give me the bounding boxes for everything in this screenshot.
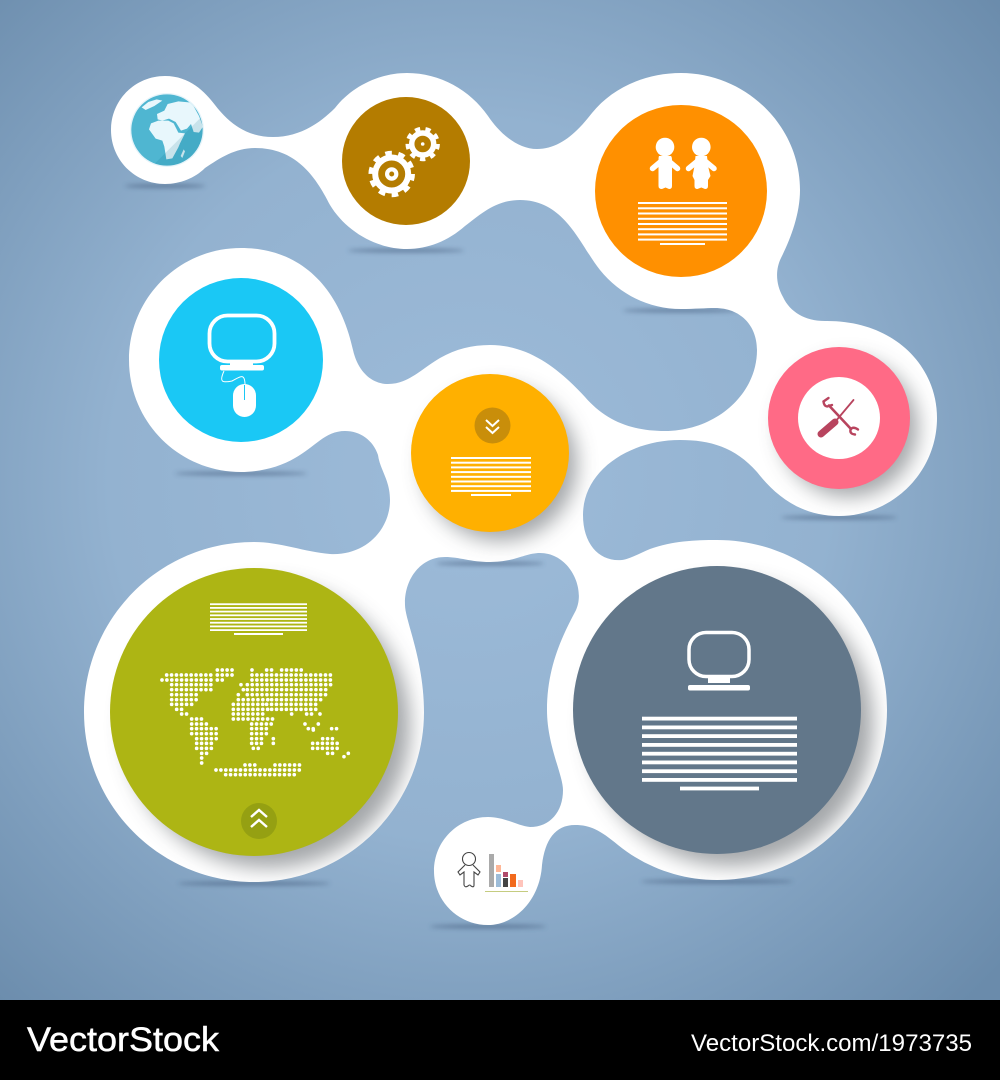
inner card shadows bbox=[126, 359, 918, 868]
icon: small bar chart bbox=[485, 854, 528, 892]
icon: small gear bbox=[408, 129, 438, 159]
node: slate card bbox=[573, 566, 861, 854]
text lines: yellow bbox=[451, 457, 531, 496]
icon: boy bbox=[652, 138, 678, 189]
node: blue monitor and mouse bbox=[159, 278, 323, 442]
image id text: VectorStock.com/1973735 bbox=[691, 1030, 972, 1057]
icon: dotted world map bbox=[162, 670, 349, 775]
watermark bar bbox=[0, 1000, 1000, 1080]
ground shadows bbox=[125, 184, 897, 928]
icon: large gear bbox=[371, 153, 413, 195]
node: globe bbox=[130, 93, 204, 167]
white connected metaball shape bbox=[84, 73, 937, 925]
icon: mouse bbox=[222, 371, 256, 417]
node: gears bbox=[342, 97, 470, 225]
icon: monitor bbox=[210, 316, 274, 370]
node: orange people bbox=[595, 105, 767, 277]
icon: chevron badge bbox=[474, 408, 510, 444]
icon: girl bbox=[688, 138, 714, 189]
node: yellow card bbox=[411, 374, 569, 532]
text lines: orange bbox=[638, 202, 727, 245]
node: green map card bbox=[110, 568, 398, 856]
text lines: slate bbox=[642, 717, 797, 790]
icon: child outline bbox=[458, 852, 480, 887]
icon: monitor bbox=[688, 632, 750, 690]
node: pink tools bbox=[768, 347, 910, 489]
icon: green chevron badge bbox=[241, 803, 277, 839]
brand text: VectorStock bbox=[27, 1021, 220, 1059]
icon: screwdriver and wrench bbox=[821, 398, 858, 434]
text lines: green bbox=[210, 603, 307, 635]
